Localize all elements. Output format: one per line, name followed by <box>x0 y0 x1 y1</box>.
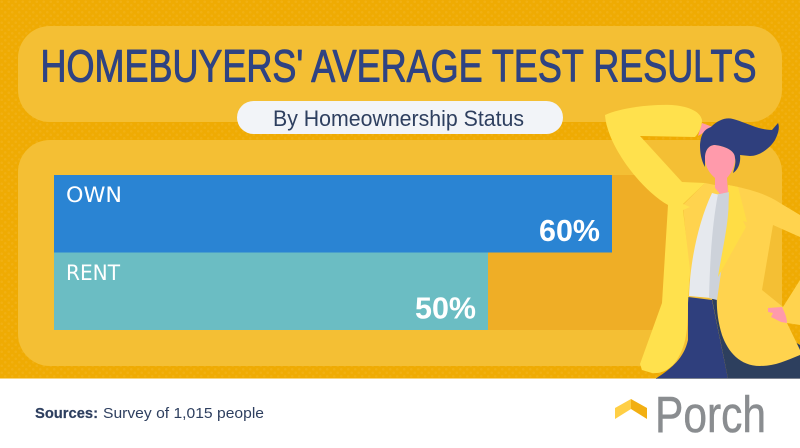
hair <box>700 118 779 173</box>
trousers shadow <box>712 298 800 378</box>
bar: rent <box>54 252 488 330</box>
neck and face <box>705 145 735 194</box>
hand on hip <box>768 307 787 323</box>
logo: Porch: Porch <box>655 386 766 443</box>
footer bottom line <box>656 378 800 379</box>
raised arm and left jacket <box>605 105 705 373</box>
bar: rent: RENT <box>66 261 120 285</box>
logo: Porch <box>615 386 766 443</box>
illustration: thinking person in yellow jacket <box>605 105 800 379</box>
bar: rent: 50% <box>415 292 476 326</box>
shirt <box>689 193 720 298</box>
bar: own: 60% <box>539 214 600 248</box>
sources note: Sources: <box>35 405 98 422</box>
hand behind head <box>698 123 713 136</box>
bar: own: OWN <box>66 183 122 207</box>
panel: title background <box>18 26 782 122</box>
icon: roof chevron <box>615 399 647 419</box>
bar chart <box>54 175 676 330</box>
trousers <box>656 297 728 378</box>
inner jacket <box>683 183 720 280</box>
sources note: Survey of 1,015 people <box>103 405 264 422</box>
shirt shadow <box>709 192 729 300</box>
subtitle pill: By Homeownership Status <box>273 106 524 131</box>
panel: chart background <box>18 140 782 366</box>
subtitle pill <box>237 101 563 134</box>
bar track <box>54 175 676 330</box>
right lapel <box>718 185 747 277</box>
right jacket panel <box>717 185 800 366</box>
bar: own <box>54 175 612 252</box>
sources note <box>35 405 264 422</box>
